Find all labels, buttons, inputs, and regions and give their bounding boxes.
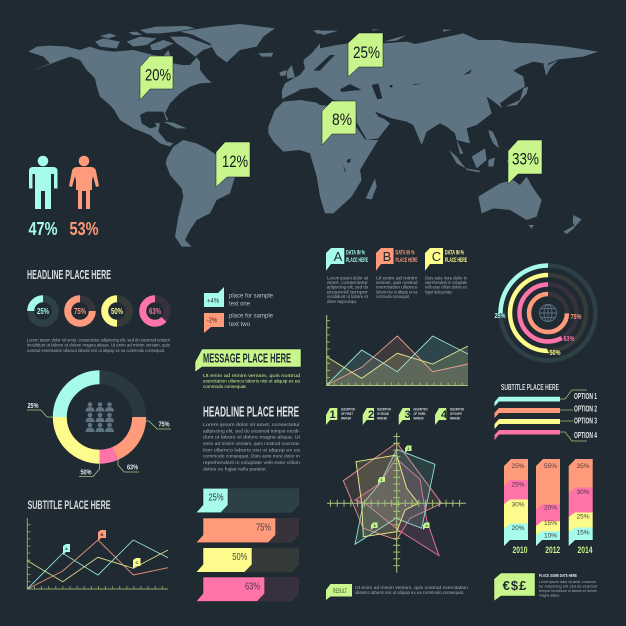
- heading: subtitle right: SUBTITLE PLACE HERE: [501, 383, 559, 392]
- legend marker 4: MARKER: [450, 416, 460, 420]
- legend marker 2: MARKER: [377, 416, 387, 420]
- stacked bar 2012: [536, 459, 560, 556]
- icon: globe: [540, 304, 556, 322]
- radial label 75%: 75%: [570, 312, 582, 321]
- text: place for sample one: text one: [229, 302, 251, 308]
- option bar 4: OPTION 4: [574, 430, 597, 440]
- text block: donut description: nostrud exercitation ullamco laboris nisi ut aliquip ex ea commodo consequat.: [27, 348, 165, 353]
- progress bar 25%: [196, 488, 299, 513]
- text block: message description: commodo consequat.: [203, 384, 247, 389]
- callout: 20%: 20%: [145, 66, 171, 84]
- legend marker 3: OF THIRD: [414, 412, 426, 416]
- legend marker 4: OF FOURTH: [450, 412, 462, 416]
- text block: date note: magna aliqua.: [539, 594, 560, 598]
- tag A: PLACE HERE: [346, 258, 368, 264]
- text: place for sample two: [229, 314, 274, 328]
- text block: date note: tur adipiscing elit, sed do eiusmod: [539, 584, 597, 588]
- text block: headline description: enim ad minim veniam, quis nostrud exercita-: [203, 441, 301, 446]
- text block: headline description: tion ullamco laboris nisi ut aliquip ex ea: [203, 447, 301, 452]
- donut label 63%: [118, 459, 139, 472]
- legend marker 4: DESCRIPTION: [450, 408, 464, 412]
- callout: -2%: [204, 313, 224, 333]
- donut label 50%: 50%: [80, 468, 92, 476]
- radar marker 4: 4: [425, 523, 428, 528]
- result tag: RESULT: [333, 588, 347, 595]
- icon: male figure 47%: 47%: [28, 219, 58, 239]
- stacked bar 2012: 20%: [544, 504, 557, 512]
- heading: headline left: HEADLINE PLACE HERE: [27, 267, 111, 282]
- donut label 25%: 25%: [28, 401, 39, 410]
- option bar 3: OPTION 3: [574, 416, 597, 426]
- small donut 75%: [68, 299, 92, 323]
- radial label 25%: 25%: [494, 311, 506, 320]
- donut label 75%: [145, 420, 171, 429]
- progress bar 50%: [196, 548, 299, 572]
- tag B: [376, 248, 418, 271]
- text: place for sample one: [229, 294, 274, 308]
- radar marker 2: 2: [407, 446, 410, 451]
- text block: donut description: incididunt ut labore et dolore magna aliqua. Ut enim ad minim veniam, quis: [27, 343, 170, 348]
- legend marker 3: DESCRIPTION: [414, 408, 428, 412]
- stacked bar 2014: 2014: [578, 545, 593, 556]
- heading: headline centre: HEADLINE PLACE HERE: [203, 404, 299, 420]
- callout: 20%: [140, 56, 173, 100]
- text block: column B: exercitation ullamco: [376, 285, 418, 290]
- text block: column B: laboris nisi ut aliquip ex ea: [376, 289, 418, 294]
- text block: date note: tempor incididunt ut labore et dolore: [539, 589, 597, 593]
- chart marker: yellow: C: [136, 560, 139, 565]
- progress bar 75%: [196, 518, 299, 543]
- small donut 50%: [105, 299, 129, 323]
- text block: column A: adipiscing elit, sed do: [327, 285, 369, 290]
- chart marker: salmon: B: [101, 532, 104, 537]
- option bar 2: OPTION 2: [574, 404, 597, 414]
- text block: column C: [425, 275, 468, 294]
- stacked bar 2014: 15%: [576, 530, 590, 536]
- progress bar 63%: [196, 577, 299, 602]
- world map: [28, 24, 598, 247]
- donut label 63%: 63%: [127, 462, 138, 472]
- callout: +4%: +4%: [207, 296, 219, 305]
- text block: message description: Ut enim ad minim veniam, quis nostrud: [203, 373, 301, 378]
- stacked bar 2010: 20%: [511, 525, 525, 532]
- text block: date note: PLACE SOME DATE HERE: [539, 573, 577, 578]
- legend marker 2: 2: [368, 409, 374, 421]
- callout: 12%: 12%: [222, 153, 248, 171]
- legend marker 2: [363, 408, 391, 425]
- small donut 50%: 50%: [111, 307, 123, 316]
- line chart: [27, 518, 168, 589]
- legend marker 1: DESCRIPTION: [341, 408, 355, 412]
- radial label 63%: 63%: [564, 334, 575, 343]
- legend marker 3: 3: [404, 409, 411, 421]
- text block: column C: Duis aute irure dolor in: [425, 275, 468, 280]
- tag A: A: [334, 249, 343, 264]
- tag C: [425, 248, 467, 271]
- stacked bar 2010: 25%: [511, 463, 525, 470]
- stacked bar 2014: 35%: [576, 463, 590, 470]
- radar marker 3: 3: [373, 523, 376, 528]
- stacked bar 2010: [504, 459, 528, 556]
- text block: column B: veniam, quis nostrud: [376, 280, 418, 285]
- text block: column B: commodo consequat.: [376, 294, 410, 299]
- option bar 2: [494, 404, 597, 418]
- legend marker 3: [399, 408, 428, 425]
- text block: column C: reprehenderit in voluptate: [425, 280, 468, 285]
- callout: 33%: [508, 140, 542, 184]
- message banner: [195, 349, 301, 372]
- text block: column A: incididunt ut labore et: [327, 294, 369, 299]
- text block: headline description: commodo consequat. Duis aute irure dolor in: [203, 454, 301, 459]
- text block: date note: [539, 573, 598, 598]
- text block: headline description: reprehenderit in voluptate velit esse cillum: [203, 460, 301, 465]
- text block: headline description: [203, 422, 301, 471]
- radar marker 1: 1: [380, 477, 383, 482]
- option bar 4: [494, 430, 597, 441]
- small donut 63%: 63%: [149, 307, 161, 316]
- result tag: [326, 584, 352, 600]
- callout: 8%: 8%: [332, 111, 352, 129]
- small donut 63%: [143, 299, 167, 323]
- heading: subtitle left: SUBTITLE PLACE HERE: [28, 498, 110, 512]
- chart marker: cyan: A: [65, 546, 68, 551]
- legend marker 2: OF SECOND: [377, 412, 389, 416]
- callout: 8%: [322, 101, 356, 145]
- text block: headline description: Lorem ipsum dolor sit amet, consectetur: [203, 422, 301, 427]
- large donut chart: [27, 365, 171, 476]
- donut label 75%: 75%: [158, 420, 170, 428]
- stacked bar 2010: 2010: [512, 545, 528, 556]
- icon: female figure 53%: 53%: [70, 219, 98, 239]
- text block: donut description: Lorem ipsum dolor sit amet, consectetur adipiscing elit, sed do eiusmod tempor: [27, 338, 171, 342]
- text block: message description: [203, 373, 301, 389]
- text block: donut description: [27, 338, 171, 353]
- chart marker: salmon: [98, 530, 106, 541]
- callout: 25%: 25%: [353, 44, 380, 62]
- icon: male figure 47%: [28, 156, 58, 239]
- tag A: [326, 248, 368, 271]
- stacked bar 2012: 10%: [544, 532, 557, 540]
- text block: result description: ullamco laboris nisi ut aliquip ex ea commodo consequat.: [355, 590, 464, 595]
- progress bar 63%: 63%: [245, 580, 260, 592]
- currency callout: [494, 573, 535, 601]
- legend marker 1: OF FIRST: [341, 412, 354, 416]
- stacked bar 2014: [569, 459, 593, 556]
- legend marker 1: 1: [329, 409, 336, 421]
- legend marker 1: [326, 408, 355, 425]
- callout: +4%: [204, 287, 224, 307]
- text block: column C: fugiat nulla pariatur.: [425, 289, 453, 294]
- donut label 50%: [79, 463, 100, 476]
- text block: column A: Lorem ipsum dolor sit: [327, 275, 369, 280]
- stacked bar 2012: 55%: [544, 463, 557, 470]
- legend marker 2: DESCRIPTION: [377, 408, 391, 412]
- text block: column A: [327, 275, 369, 304]
- text block: column A: dolore magna aliqua.: [327, 299, 357, 304]
- stacked bar 2010: 25%: [511, 482, 525, 488]
- donut label 25%: [27, 401, 53, 417]
- legend marker 4: [435, 408, 464, 425]
- progress bar 75%: 75%: [256, 522, 271, 534]
- text: place for sample one: place for sample: [229, 294, 274, 300]
- callout: -2%: -2%: [207, 316, 217, 324]
- callout: 25%: [348, 33, 383, 77]
- callout: 33%: 33%: [512, 150, 539, 168]
- radial progress chart: [494, 266, 596, 360]
- legend marker 1: MARKER: [341, 416, 351, 420]
- icon: female figure 53%: [69, 156, 99, 239]
- message banner: MESSAGE PLACE HERE: [203, 350, 291, 366]
- text: place for sample two: place for sample: [229, 314, 274, 320]
- progress bar 50%: 50%: [232, 551, 247, 563]
- text block: column A: amet, consectetur: [327, 280, 369, 285]
- text block: column A: eiusmod tempor: [327, 289, 369, 294]
- tag C: DATA IN %: [445, 251, 464, 257]
- text block: date note: Lorem ipsum dolor sit amet, consecte-: [539, 580, 598, 584]
- tag B: PLACE HERE: [396, 258, 418, 264]
- chart marker: yellow: [133, 558, 140, 569]
- text block: headline description: adipiscing elit, sed do eiusmod tempor incidi-: [203, 428, 301, 433]
- text block: headline description: dolore eu fugiat nulla pariatur.: [203, 466, 267, 471]
- area chart: [326, 315, 468, 386]
- tag C: C: [432, 249, 441, 264]
- tag B: B: [383, 249, 391, 264]
- currency callout: €$£: [503, 578, 527, 593]
- option bar 3: [494, 416, 597, 429]
- text block: column B: [376, 275, 418, 299]
- text block: result description: [355, 585, 469, 595]
- small donut 25%: 25%: [37, 307, 49, 316]
- small donut 25%: [31, 299, 55, 323]
- text block: message description: exercitation ullamco laboris nisi ut aliquip ex ea: [203, 378, 301, 384]
- text block: headline description: dunt ut labore et dolore magna aliqua. Ut: [203, 435, 301, 440]
- stacked bar 2014: 30%: [576, 489, 590, 496]
- stacked bar 2012: 15%: [544, 520, 557, 527]
- option bar 1: OPTION 1: [574, 391, 597, 401]
- progress bar 25%: 25%: [208, 492, 224, 504]
- tag A: DATA IN %: [346, 251, 365, 257]
- text block: result description: Ut enim ad minim veniam, quis nostrud exercitation: [355, 585, 469, 590]
- text: place for sample two: text two: [229, 322, 251, 328]
- small donut 75%: 75%: [74, 307, 86, 316]
- icon: group of people: [86, 402, 114, 432]
- option bar 1: [494, 390, 597, 406]
- text block: column B: Ut enim ad minim: [376, 275, 418, 280]
- stacked bar 2014: 25%: [576, 514, 590, 520]
- radar chart: [327, 433, 466, 573]
- radial label 50%: 50%: [550, 348, 561, 357]
- stacked bar 2010: 30%: [511, 502, 525, 508]
- tag C: PLACE HERE: [445, 258, 467, 264]
- legend marker 4: 4: [441, 409, 448, 421]
- text block: column C: velit esse cillum dolore eu: [425, 285, 468, 290]
- callout: 12%: [216, 142, 250, 187]
- stacked bar 2012: 2012: [545, 545, 560, 556]
- tag B: DATA IN %: [396, 251, 415, 257]
- chart marker: cyan: [63, 544, 70, 555]
- legend marker 3: MARKER: [414, 416, 424, 420]
